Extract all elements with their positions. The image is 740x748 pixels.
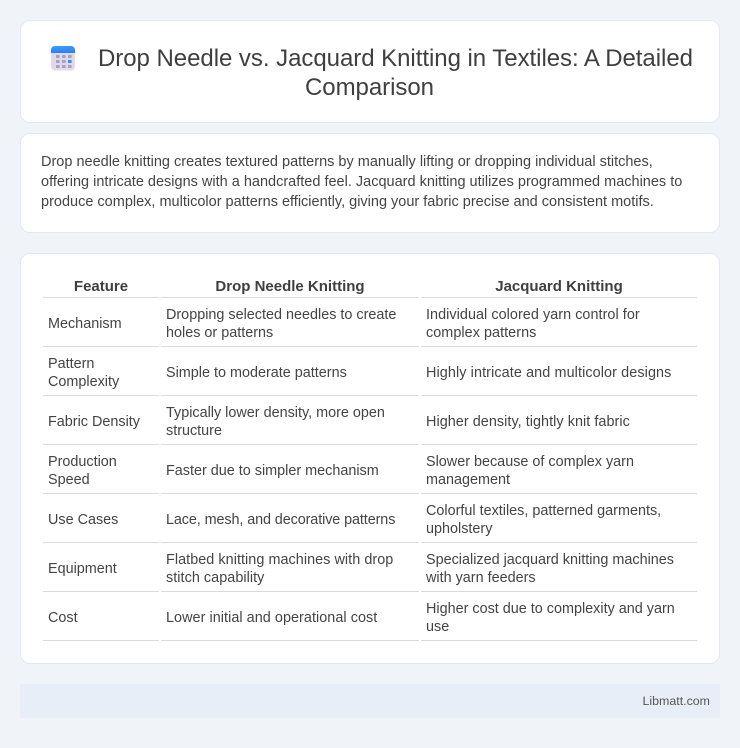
comparison table: Fabric Density [48, 414, 140, 430]
comparison table: Lace, mesh, and decorative patterns [166, 512, 395, 528]
comparison table: complex patterns [426, 325, 536, 341]
footer text: Libmatt.com [643, 694, 710, 708]
comparison table: Drop Needle Knitting [215, 278, 365, 295]
table card [20, 253, 720, 664]
icon: calendar grid [51, 46, 75, 70]
comparison table: use [426, 619, 449, 635]
comparison table: Higher cost due to complexity and yarn [426, 601, 675, 617]
comparison table: Dropping selected needles to create [166, 307, 396, 323]
comparison table: Highly intricate and multicolor designs [426, 365, 671, 381]
comparison table: stitch capability [166, 570, 264, 586]
intro text: Drop needle knitting creates textured patterns by manually lifting or dropping individual stitches, [41, 154, 653, 170]
comparison table: upholstery [426, 521, 492, 537]
comparison table: Individual colored yarn control for [426, 307, 640, 323]
comparison table: Higher density, tightly knit fabric [426, 414, 630, 430]
comparison table: Colorful textiles, patterned garments, [426, 503, 661, 519]
comparison table: Simple to moderate patterns [166, 365, 347, 381]
comparison table: Use Cases [48, 512, 118, 528]
comparison table: holes or patterns [166, 325, 273, 341]
comparison table: Complexity [48, 374, 119, 390]
comparison table: Typically lower density, more open [166, 405, 385, 421]
title [98, 45, 693, 101]
comparison table: Lower initial and operational cost [166, 610, 377, 626]
comparison table: Production [48, 454, 117, 470]
comparison table: Pattern [48, 356, 94, 372]
comparison table: Specialized jacquard knitting machines [426, 552, 674, 568]
title: Comparison [305, 74, 434, 101]
comparison table: Jacquard Knitting [495, 278, 623, 295]
footer bar [20, 684, 720, 718]
comparison table: with yarn feeders [426, 570, 536, 586]
comparison table: structure [166, 423, 222, 439]
comparison table: Mechanism [48, 316, 122, 332]
comparison table: Slower because of complex yarn [426, 454, 634, 470]
comparison table: Equipment [48, 561, 117, 577]
intro text: produce complex, multicolor patterns efficiently, giving your fabric precise and consistent motifs. [41, 194, 654, 210]
intro card [20, 133, 720, 233]
comparison table: management [426, 472, 510, 488]
header card [20, 20, 720, 123]
comparison table: Feature [74, 278, 128, 295]
comparison table [43, 278, 697, 641]
comparison table: Cost [48, 610, 78, 626]
comparison table: Faster due to simpler mechanism [166, 463, 379, 479]
comparison table: Flatbed knitting machines with drop [166, 552, 393, 568]
comparison table: Speed [48, 472, 90, 488]
intro text: offering intricate designs with a handcrafted feel. Jacquard knitting utilizes programmed machines to [41, 174, 682, 190]
title: Drop Needle vs. Jacquard Knitting in Textiles: A Detailed [98, 45, 693, 72]
intro text [41, 154, 682, 210]
